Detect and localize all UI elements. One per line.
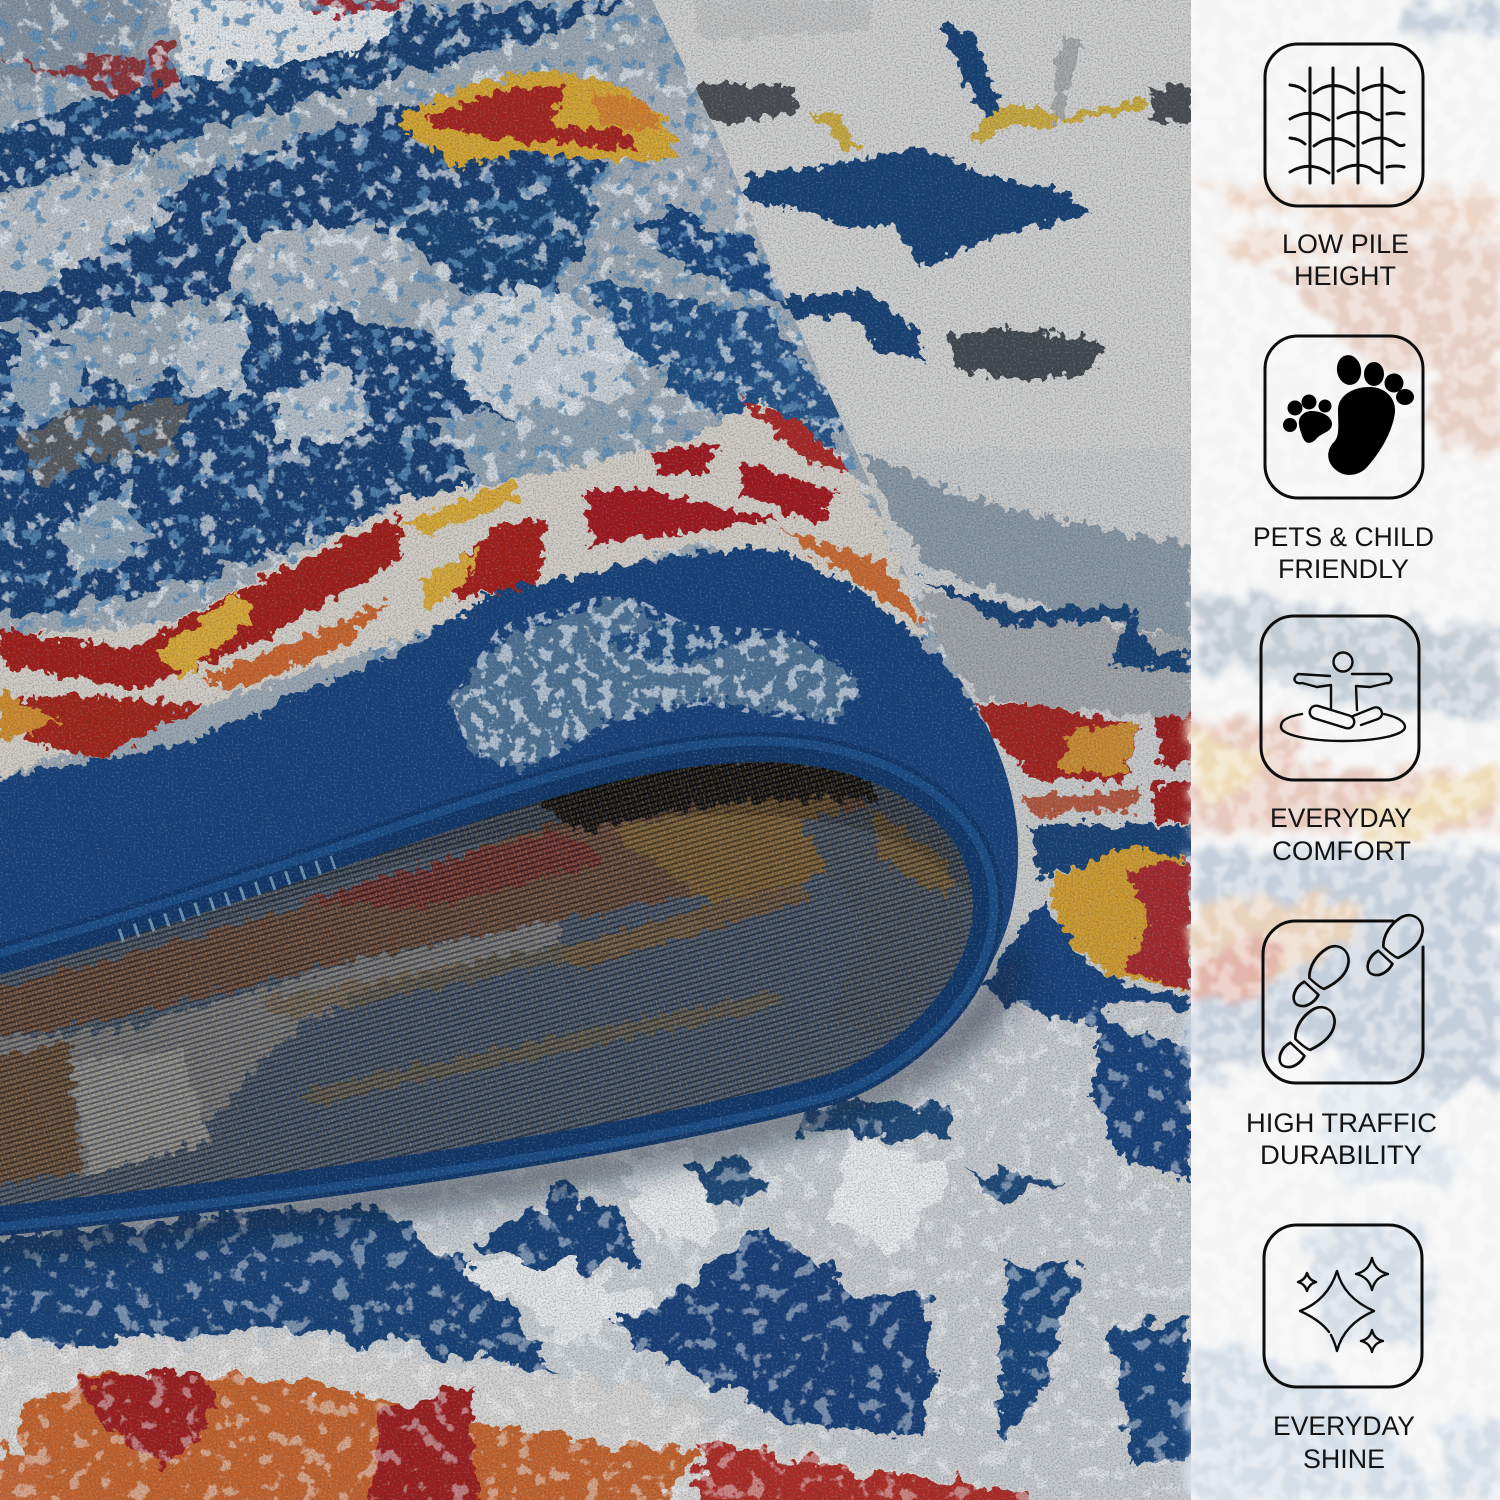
pale flecks on mottled patch (430, 590, 880, 780)
label: pets and child friendly: PETS & CHILD (1253, 522, 1434, 552)
blue binding edge (0, 741, 994, 1228)
grey motif (20, 400, 190, 490)
label: low pile height: LOW PILE (1282, 229, 1409, 259)
rug backing underside (0, 740, 1010, 1240)
photo grain light (0, 0, 1191, 1500)
blue border (0, 545, 1040, 1000)
label: high traffic durability (1246, 1108, 1437, 1170)
white flecks on roll (0, 0, 1000, 660)
rug photograph (0, 0, 1191, 1500)
flat rug background (0, 0, 1191, 1500)
yellow red flower (395, 70, 680, 168)
label: low pile height: HEIGHT (1294, 261, 1396, 291)
panel: translucent features sidebar (1191, 0, 1500, 1500)
label: low pile height (1282, 229, 1409, 291)
blue field pattern (0, 0, 620, 200)
label: high traffic durability: DURABILITY (1260, 1140, 1422, 1170)
label: high traffic durability: HIGH TRAFFIC (1246, 1108, 1437, 1138)
flower motif (745, 150, 1090, 268)
light patches (0, 170, 180, 290)
dark shadow in fold (540, 760, 880, 835)
rolled rug top surface (0, 0, 1045, 1000)
blue flecks on roll (0, 0, 1000, 660)
dark shadow under roll (0, 930, 1025, 1260)
label: everyday shine (1273, 1411, 1415, 1474)
label: everyday comfort: EVERYDAY (1270, 803, 1412, 833)
photo grain dark (0, 0, 1191, 1500)
label: pets and child friendly (1253, 522, 1434, 584)
label: everyday shine: SHINE (1303, 1444, 1385, 1474)
white flecks on lower rug (0, 1000, 1191, 1500)
red ornamental band (0, 400, 930, 790)
orange red bottom band (0, 1340, 1000, 1500)
label: everyday comfort (1270, 803, 1412, 866)
flat rug steel shadow motif (860, 450, 1191, 640)
icon: high traffic footprints (1263, 909, 1430, 1083)
icon: pets and child friendly (1265, 336, 1423, 498)
label: everyday comfort: COMFORT (1272, 836, 1411, 866)
mottled patch (450, 595, 860, 770)
icon: low pile height (1265, 44, 1423, 206)
label: everyday shine: EVERYDAY (1273, 1411, 1415, 1441)
lower rug section (0, 1000, 1191, 1500)
icon: everyday comfort meditation (1261, 616, 1419, 780)
icon: everyday shine sparkles (1264, 1225, 1422, 1387)
label: pets and child friendly: FRIENDLY (1278, 554, 1409, 584)
lower right rug motifs (975, 705, 1140, 780)
